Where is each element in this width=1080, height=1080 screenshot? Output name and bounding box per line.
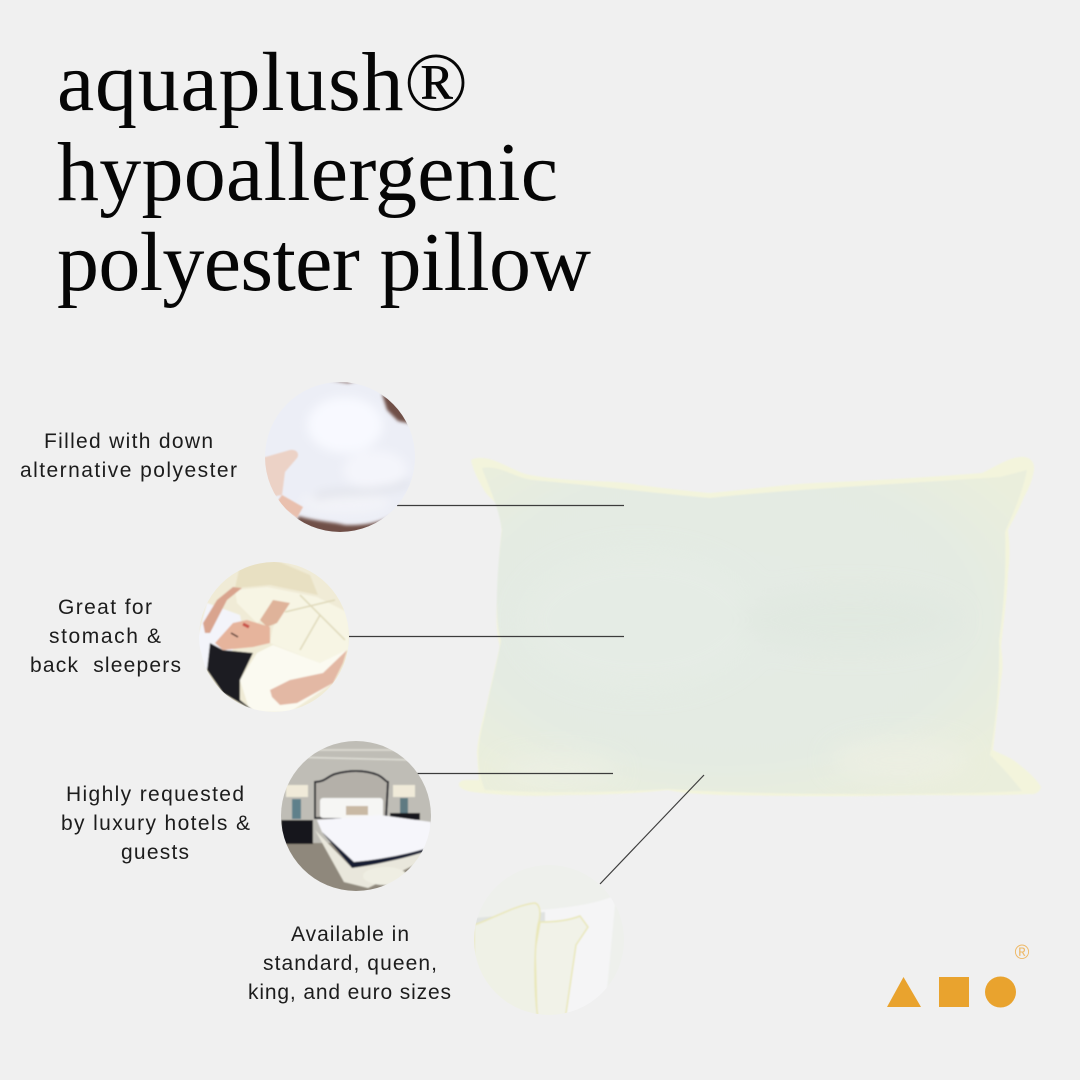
headboard (315, 771, 388, 818)
ceiling mouldings (290, 750, 412, 760)
pillow photo (459, 457, 1041, 796)
title (57, 36, 591, 309)
caption: sizes (248, 923, 451, 1004)
middle pillow (535, 916, 588, 1020)
pillow flange (459, 457, 1041, 796)
fibre shading (310, 400, 393, 476)
caption: sleepers: stomach & (49, 625, 161, 648)
title line 2: hypoallergenic (57, 126, 558, 219)
bed base (315, 830, 431, 888)
gray band (476, 912, 545, 923)
caption: filling (20, 430, 237, 482)
headboard (235, 560, 318, 595)
caption: sizes: Available in (291, 923, 409, 946)
photo: polyester fill in hand (265, 382, 408, 532)
face (215, 620, 270, 650)
caption: sleepers: Great for (58, 596, 152, 619)
caption: sleepers (30, 596, 181, 677)
photo: luxury hotel bed (281, 741, 431, 891)
stool (375, 870, 406, 886)
caption: sizes: standard, queen, (263, 952, 437, 975)
robe (235, 587, 349, 663)
duvet (240, 645, 347, 712)
caption: filling: alternative polyester (20, 459, 237, 482)
callout leader lines (349, 506, 704, 884)
logo triangle (887, 977, 921, 1007)
caption: hotels: by luxury hotels & (61, 812, 250, 835)
caption: sleepers: back sleepers (30, 654, 181, 677)
logo (887, 942, 1030, 1008)
floor (286, 842, 412, 891)
raised arm (203, 587, 242, 633)
bed mattress (317, 815, 431, 868)
photo: woman sleeping on pillow (199, 562, 349, 712)
line: hotels (417, 772, 613, 774)
hand (262, 450, 303, 518)
line: filling (397, 504, 624, 506)
caption: hotels (61, 783, 250, 864)
logo circle (985, 976, 1016, 1008)
pillow shading (500, 550, 970, 784)
dark background corners (296, 382, 408, 532)
line: sizes (600, 775, 704, 884)
eye and lips (231, 633, 238, 637)
lower arm (270, 650, 347, 705)
bed pillows (320, 798, 383, 818)
line: sleepers (349, 636, 624, 638)
white pillow (199, 603, 242, 670)
logo square (939, 977, 969, 1007)
registered mark: ® (1015, 942, 1030, 964)
back pillow (542, 898, 614, 1012)
nightstands (281, 820, 313, 844)
lamps (286, 785, 415, 819)
caption: sizes: king, and euro sizes (248, 981, 451, 1004)
caption: hotels: Highly requested (66, 783, 244, 806)
title line 1: aquaplush® (57, 36, 468, 129)
caption: hotels: guests (121, 841, 189, 864)
front pillow (474, 903, 540, 1020)
pillow body (478, 468, 1027, 794)
hair (207, 643, 255, 712)
chest (260, 600, 290, 627)
caption: filling: Filled with down (44, 430, 213, 453)
title line 3: polyester pillow (57, 216, 591, 309)
photo: pillow sizes (474, 902, 589, 1014)
